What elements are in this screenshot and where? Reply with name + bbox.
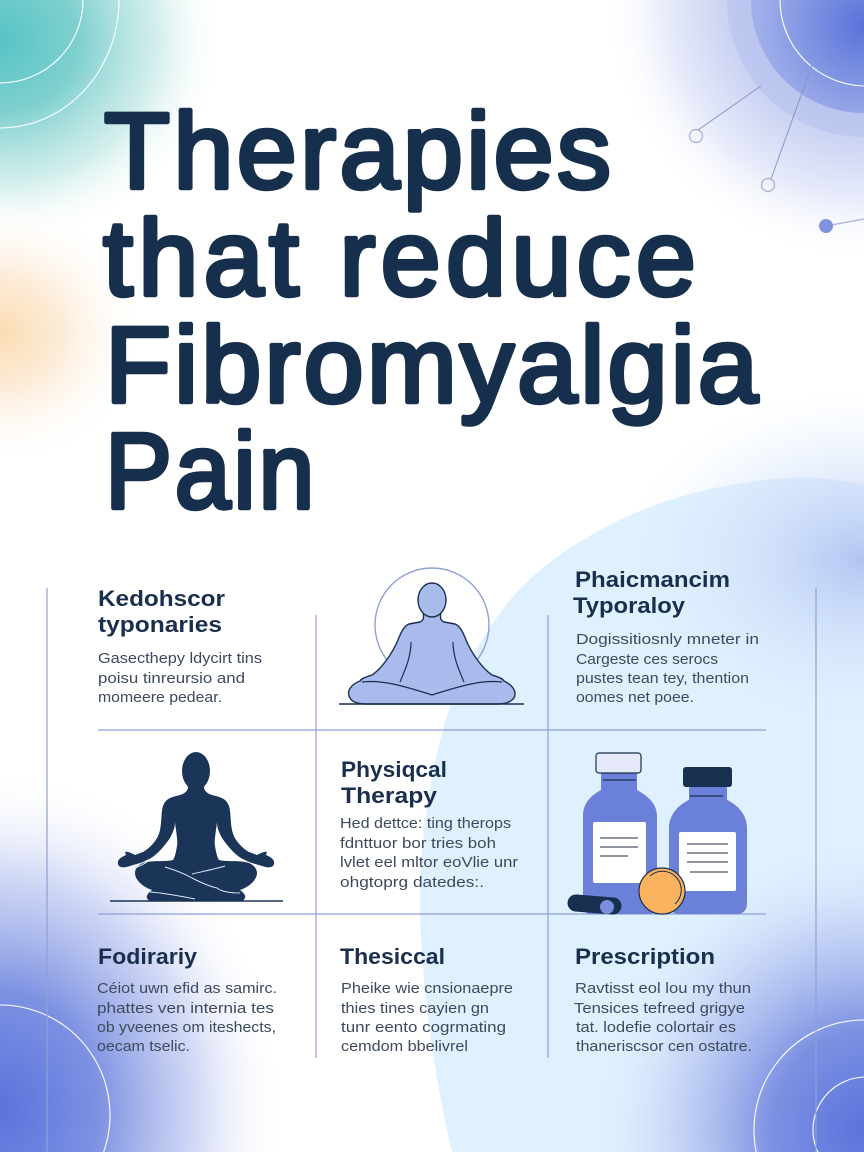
panel: Fodirariy: Fodirariy	[98, 944, 197, 969]
title: Pain	[105, 412, 317, 532]
panel: Kedohscor typonaries: poisu tinreursio and	[98, 670, 245, 687]
panel: Thesiccal: Thesiccal	[340, 944, 445, 969]
panel: Prescription: Prescription	[575, 944, 715, 969]
panel: Prescription: Ravtisst eol lou my thun	[575, 980, 751, 997]
panel: Physical Therapy: Therapy	[341, 783, 438, 808]
left bottle	[583, 753, 657, 914]
panel: Kedohscor typonaries: momeere pedear.	[98, 689, 222, 706]
network nodes	[690, 65, 864, 233]
panel: Fodirariy	[97, 944, 277, 1055]
panel: Fodirariy: phattes ven internia tes	[97, 1000, 274, 1017]
panel: Prescription: Tensices tefreed grigye	[574, 1000, 745, 1017]
panel: Phaicmancim Typoraloy: Dogissitiosnly mneter in	[576, 631, 759, 648]
panel: Thesiccal: thies tines cayien gn	[341, 1000, 489, 1017]
icon: medication bottles and pills	[576, 753, 747, 914]
panel: Kedohscor typonaries: Kedohscor	[98, 586, 225, 611]
panel: Physical Therapy: lvlet eel mltor eoVlie unr	[340, 854, 518, 871]
panel: Phaicmancim Typoraloy: Cargeste ces serocs	[576, 651, 718, 668]
panel: Phaicmancim Typoraloy: Phaicmancim	[575, 567, 730, 592]
panel: Kedohscor typonaries: typonaries	[98, 612, 222, 637]
panel: Kedohscor typonaries: Gasecthepy ldycirt tins	[98, 650, 262, 667]
panel: Physical Therapy: fdnttuor bor tries boh	[340, 835, 496, 852]
capsule pill	[576, 900, 614, 914]
panel: Phaicmancim Typoraloy: Typoraloy	[573, 593, 686, 618]
panel: Prescription: thaneriscsor cen ostatre.	[576, 1038, 752, 1055]
title: that reduce	[103, 197, 696, 318]
title: Fibromyalgia	[105, 304, 759, 425]
right bottle	[669, 767, 747, 914]
panel: Prescription: tat. lodefie colortair es	[576, 1019, 736, 1036]
icon: lavender meditating figure	[339, 568, 524, 704]
panel: Thesiccal: cemdom bbelivrel	[341, 1038, 468, 1055]
panel: Fodirariy: oecam tselic.	[97, 1038, 190, 1055]
panel: Fodirariy: ob yveenes om iteshects,	[97, 1019, 276, 1036]
panel: Phaicmancim Typoraloy: oomes net poee.	[576, 689, 694, 706]
panel: Thesiccal: Pheike wie cnsionaepre	[341, 980, 513, 997]
panel: Fodirariy: Céiot uwn efid as samirc.	[97, 980, 277, 997]
title: Therapies	[104, 90, 611, 211]
panel: Phaicmancim Typoraloy	[573, 567, 759, 706]
panel: Thesiccal: tunr eento cogrmating	[341, 1019, 506, 1036]
grid lines	[47, 588, 816, 1152]
icon: dark meditating silhouette	[110, 752, 283, 901]
panel: Kedohscor typonaries	[98, 586, 262, 706]
panel: Thesiccal	[340, 944, 513, 1055]
panel: Physical Therapy: Physiqcal	[341, 757, 447, 782]
panel: Phaicmancim Typoraloy: pustes tean tey, thention	[576, 670, 749, 687]
round orange pill	[639, 868, 685, 914]
panel: Physical Therapy: Hed dettce: ting therops	[340, 815, 511, 832]
panel: Physical Therapy	[340, 757, 518, 891]
panel: Physical Therapy: ohgtoprg datedes:.	[340, 874, 484, 891]
panel: Prescription	[574, 944, 752, 1055]
title	[103, 90, 759, 532]
